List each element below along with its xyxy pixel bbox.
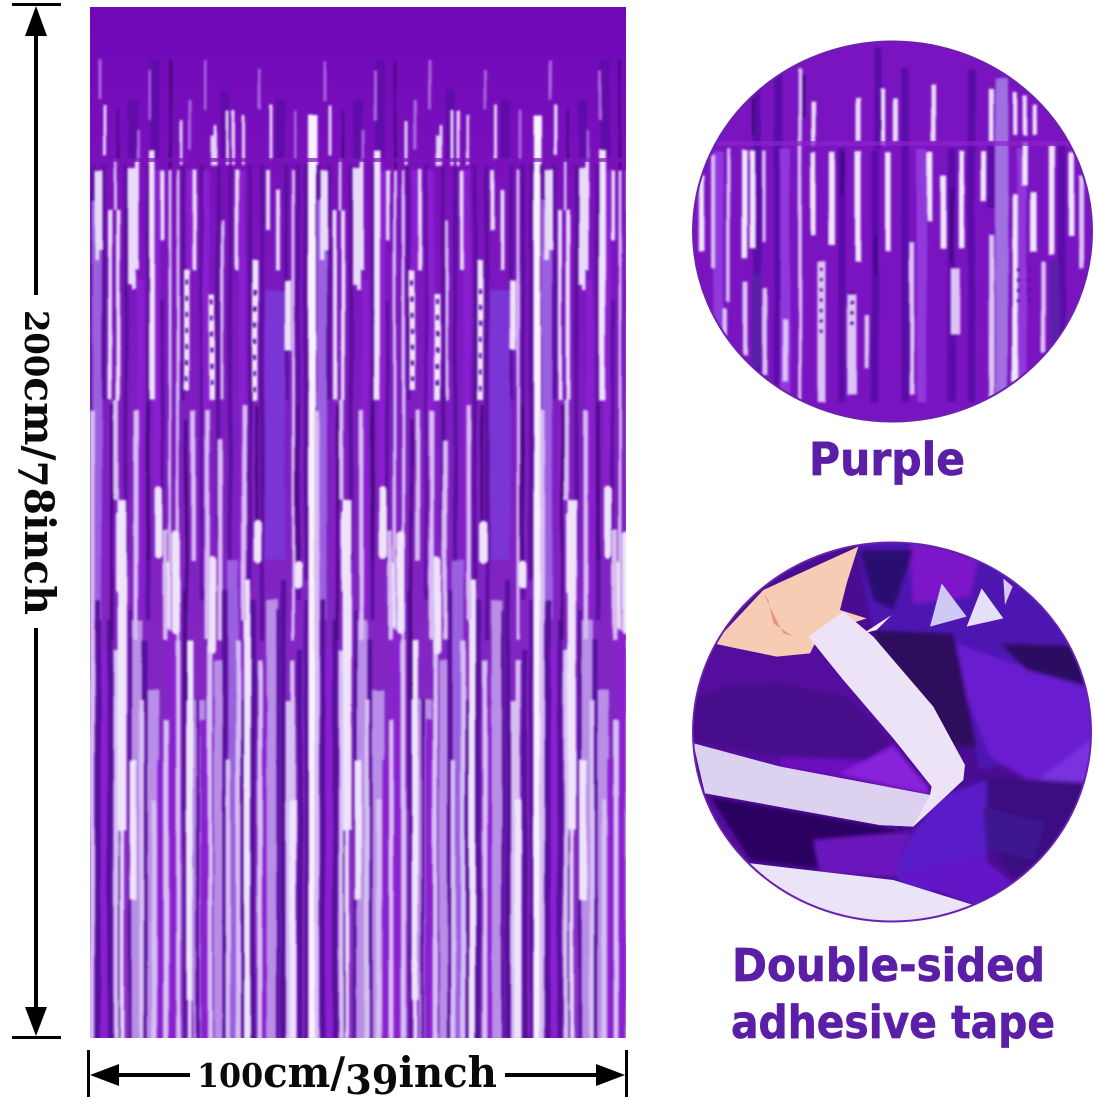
width dimension arrow bbox=[87, 1050, 628, 1097]
fingers bbox=[713, 547, 867, 657]
width label: 100cm/ bbox=[197, 1048, 348, 1097]
height dimension arrow bbox=[12, 3, 61, 1039]
caption: double-sided adhesive tape bbox=[731, 939, 1055, 1049]
height label: 8 bbox=[15, 488, 62, 515]
reflective triangles bbox=[930, 583, 967, 627]
detail circle: purple foil bbox=[693, 42, 1093, 422]
caption: double-sided adhesive tape: Double-sided bbox=[732, 939, 1045, 992]
width label: inch bbox=[399, 1048, 497, 1097]
caption: double-sided adhesive tape: adhesive tape bbox=[731, 996, 1055, 1049]
curtain photo bbox=[90, 7, 626, 1038]
height label: inch bbox=[15, 515, 64, 617]
caption: purple: Purple bbox=[809, 433, 965, 486]
foil folds bbox=[680, 530, 1100, 907]
detail circle: adhesive tape bbox=[680, 530, 1100, 930]
height label: 7 bbox=[8, 461, 55, 488]
height label: 200 cm/ bbox=[15, 310, 64, 463]
tape bbox=[693, 612, 965, 827]
